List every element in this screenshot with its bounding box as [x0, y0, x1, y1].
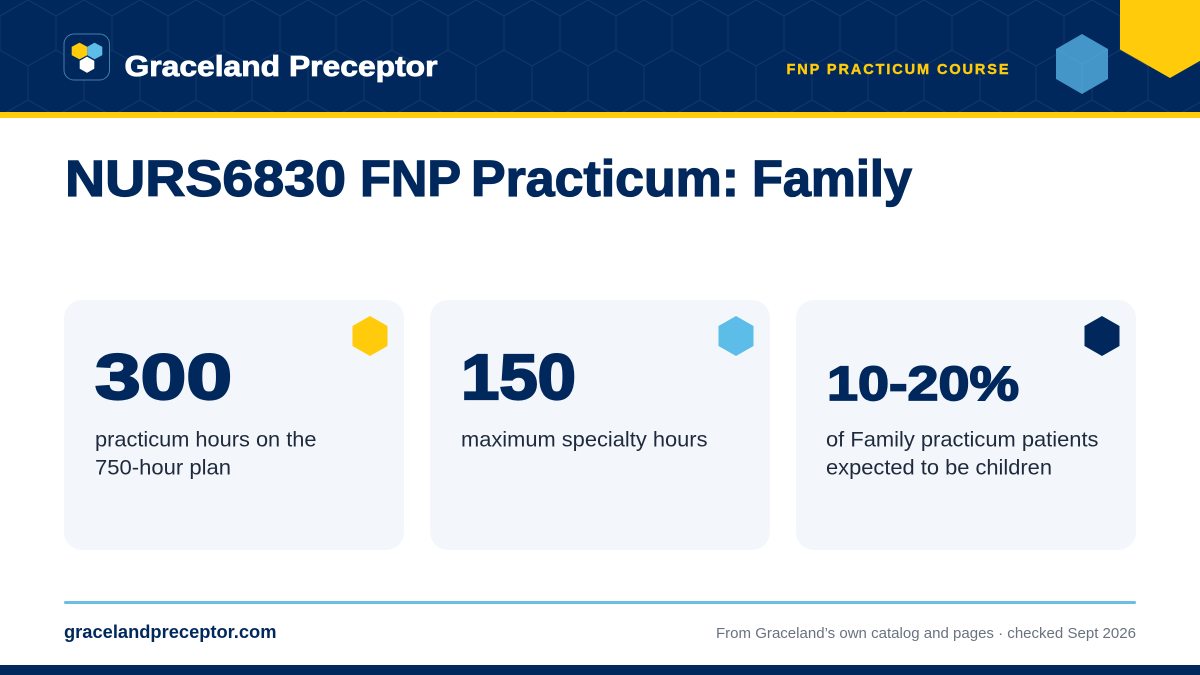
panel: 10-20% children [796, 300, 1136, 550]
panel: 300 practicum hours [64, 300, 404, 550]
decorative blue cube hexagon [1056, 34, 1108, 94]
title: NURS6830 [65, 150, 346, 207]
header accent rule [0, 112, 1200, 118]
title: Practicum: [471, 150, 739, 207]
description [95, 428, 316, 480]
stat: 300: 300 [95, 341, 232, 413]
course label: FNP PRACTICUM COURSE [786, 62, 1009, 78]
logo hexagon: white [80, 57, 94, 72]
icon: blue hexagon [718, 316, 754, 356]
logo hexagon: blue [88, 43, 102, 59]
icon: gold hexagon [352, 316, 388, 356]
logo [64, 34, 110, 80]
header band [0, 0, 1200, 118]
logo hexagon: gold [72, 43, 87, 59]
gold corner hexagon [1120, 0, 1200, 78]
description: 750-hour plan [95, 456, 231, 480]
footer site link: gracelandpreceptor.com [64, 622, 276, 642]
description [826, 428, 1098, 480]
description: maximum specialty hours [461, 428, 708, 452]
description: of Family practicum patients [826, 428, 1098, 452]
title: Family [752, 150, 913, 207]
title [65, 150, 913, 207]
stat: 150: 150 [461, 341, 576, 413]
bottom band [0, 665, 1200, 675]
brand name: Graceland Preceptor [124, 51, 438, 83]
icon: navy hexagon [1084, 316, 1120, 356]
description: practicum hours on the [95, 428, 316, 452]
description: expected to be children [826, 456, 1052, 480]
title: FNP [360, 150, 461, 207]
panel: 150 specialty hours [430, 300, 770, 550]
source note: From Graceland’s own catalog and pages · checked Sept 2026 [716, 625, 1136, 642]
stat: 10-20%: 10-20% [827, 358, 1019, 411]
footer rule [64, 601, 1136, 604]
